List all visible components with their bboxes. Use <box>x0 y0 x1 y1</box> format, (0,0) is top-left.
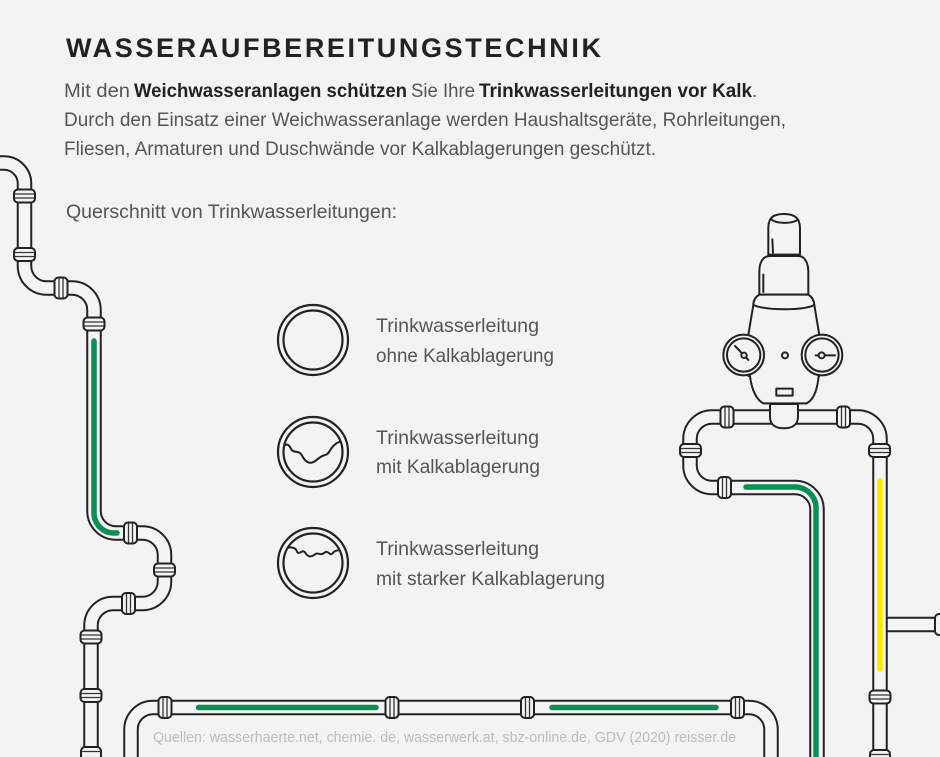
title: WASSERAUFBEREITUNGSTECHNIK <box>66 33 602 63</box>
intro text block: Trinkwasserleitungen vor Kalk <box>479 81 752 102</box>
bottom pipe <box>131 697 771 757</box>
label: with limescale: mit Kalkablagerung <box>376 457 540 478</box>
intro text block <box>64 81 786 160</box>
intro text block: . <box>752 81 757 102</box>
right pipe system <box>680 406 940 757</box>
label: with heavy limescale: mit starker Kalkablagerung <box>376 569 605 590</box>
intro text block: Sie Ihre <box>411 81 475 102</box>
intro text block: Durch den Einsatz einer Weichwasseranlage werden Haushaltsgeräte, Rohrleitungen, <box>64 110 786 131</box>
label: without limescale: Trinkwasserleitung <box>376 316 539 337</box>
intro text block: Mit den <box>64 81 130 102</box>
label: with heavy limescale: Trinkwasserleitung <box>376 539 539 560</box>
icon: pipe cross-section with limescale <box>278 417 348 487</box>
icon: pipe cross-section with heavy limescale <box>278 528 348 598</box>
pressure valve with gauges <box>723 214 842 428</box>
subheading: Querschnitt von Trinkwasserleitungen: <box>66 202 397 223</box>
left pipe <box>0 163 175 757</box>
intro text block: Weichwasseranlagen schützen <box>134 81 407 102</box>
label: with limescale <box>376 428 540 478</box>
label: without limescale <box>376 316 554 367</box>
label: with heavy limescale <box>376 539 605 590</box>
label: with limescale: Trinkwasserleitung <box>376 428 539 449</box>
label: without limescale: ohne Kalkablagerung <box>376 346 554 367</box>
source note: Quellen: wasserhaerte.net, chemie. de, wasserwerk.at, sbz-online.de, GDV (2020) reisser.de <box>153 729 736 746</box>
icon: pipe cross-section without limescale <box>278 305 348 375</box>
intro text block: Fliesen, Armaturen und Duschwände vor Kalkablagerungen geschützt. <box>64 139 656 160</box>
